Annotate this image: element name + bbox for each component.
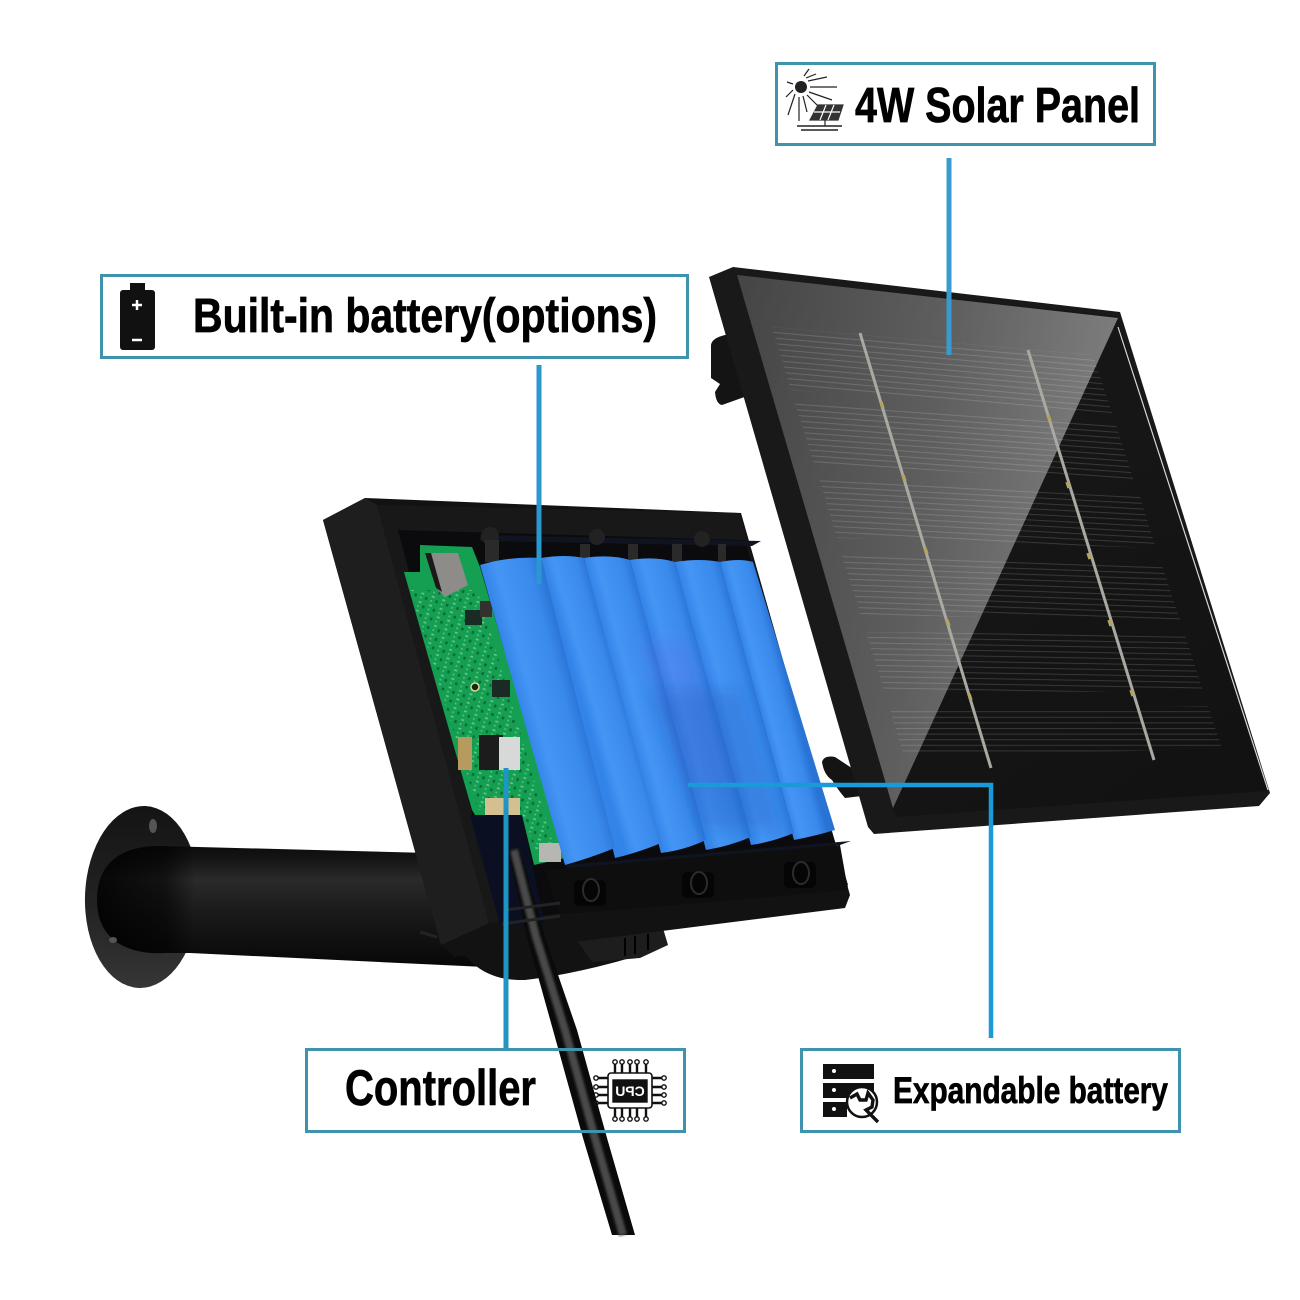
navy cavity below board bbox=[470, 815, 545, 925]
glare triangle bbox=[737, 275, 1118, 808]
flange screw hole bottom bbox=[109, 937, 117, 943]
switch dark body bbox=[479, 735, 503, 770]
busbar gold joints bbox=[881, 402, 1133, 700]
inductor bbox=[425, 553, 468, 597]
leader line: battery bbox=[536, 365, 542, 584]
leader line: expandable battery bbox=[688, 785, 991, 1038]
green board bbox=[404, 545, 565, 865]
solar cell row 2 bbox=[795, 403, 1134, 481]
cell 4 bbox=[630, 558, 751, 850]
label frame bbox=[306, 1050, 684, 1132]
icon: battery bbox=[120, 283, 155, 350]
clip slots bbox=[625, 934, 648, 956]
label: Expandable battery bbox=[802, 1050, 1180, 1132]
icon: server with wrench bbox=[823, 1064, 878, 1122]
label: Controller bbox=[306, 1050, 684, 1132]
rear mounting pegs bbox=[711, 335, 870, 798]
label frame bbox=[102, 276, 688, 358]
chip side bbox=[480, 601, 492, 617]
lower rail body bbox=[545, 845, 848, 915]
cell 5 bbox=[675, 560, 794, 845]
screw post right bbox=[793, 862, 809, 884]
post block right bbox=[784, 862, 816, 888]
solar cell row 1 bbox=[772, 327, 1112, 413]
flange screw hole top bbox=[149, 819, 157, 833]
label text: 4W Solar Panel bbox=[855, 79, 1140, 133]
mounting pole and wall flange bbox=[82, 804, 485, 990]
battery cells bbox=[480, 556, 835, 865]
dark glass bbox=[737, 275, 1268, 817]
violet sheen across cells bbox=[640, 640, 740, 790]
label frame bbox=[802, 1050, 1180, 1132]
solar cell row 5 bbox=[866, 632, 1203, 693]
post block middle bbox=[682, 872, 714, 898]
solar cell row 4 bbox=[842, 556, 1180, 620]
outer shell bbox=[323, 498, 850, 957]
left wall highlight bbox=[323, 498, 489, 945]
gold pad left bbox=[458, 737, 472, 770]
icon: CPU chip: CPU bbox=[615, 1083, 645, 1099]
tray recess behind cells bbox=[398, 530, 848, 920]
lower bracket under battery box bbox=[458, 925, 668, 980]
right edge highlight bbox=[1118, 327, 1268, 790]
chip lower bbox=[492, 680, 510, 697]
icon: sun and solar panel bbox=[786, 69, 843, 130]
cell 3 bbox=[584, 556, 706, 853]
panel frame bbox=[709, 267, 1270, 834]
cell dividers top bbox=[485, 540, 726, 564]
battery box housing bbox=[323, 498, 850, 957]
icon: CPU chip bbox=[594, 1060, 666, 1121]
leader line: solar panel bbox=[946, 158, 952, 355]
silver solder pad bbox=[539, 843, 561, 862]
power cable bbox=[420, 850, 635, 1235]
busbar left bbox=[860, 333, 991, 768]
cell 1 bbox=[480, 558, 615, 865]
screw posts top bbox=[481, 527, 710, 547]
fillet shading bbox=[97, 846, 195, 953]
cell 2 bbox=[541, 556, 661, 858]
bottom rail and screw posts bbox=[545, 841, 851, 915]
switch white cap bbox=[499, 737, 520, 770]
label text: Built-in battery(options) bbox=[193, 290, 657, 343]
chip upper bbox=[465, 610, 482, 625]
PCB controller board bbox=[404, 545, 565, 865]
wall flange disc bbox=[82, 804, 202, 990]
dark sheen across cells bbox=[650, 690, 780, 830]
cell 6 bbox=[720, 560, 835, 840]
label: 4W Solar Panel bbox=[776, 64, 1154, 144]
mounting hole bbox=[471, 683, 479, 691]
rounded bracket body bbox=[458, 925, 655, 980]
cable highlight bbox=[514, 850, 623, 1235]
busbar right bbox=[1028, 350, 1154, 760]
solar cell row 3 bbox=[819, 478, 1156, 548]
top rail bbox=[480, 535, 761, 546]
label frame bbox=[776, 64, 1154, 144]
label text: Expandable battery bbox=[893, 1070, 1168, 1111]
inner tray bbox=[377, 505, 848, 923]
solar panel bbox=[709, 267, 1270, 834]
component texture bbox=[410, 590, 555, 850]
label: Built-in battery bbox=[102, 276, 688, 358]
pole tube with base fillet bbox=[97, 846, 485, 967]
lower rail bbox=[565, 841, 851, 872]
solar cell row 6 bbox=[890, 706, 1222, 756]
cable tie bands bbox=[420, 903, 560, 937]
label text: Controller bbox=[345, 1060, 536, 1116]
leader line: controller bbox=[504, 768, 508, 1048]
screw post left bbox=[583, 879, 599, 901]
post block left bbox=[574, 880, 606, 906]
inductor shadow bbox=[425, 553, 442, 592]
cable body bbox=[508, 850, 635, 1235]
clip details bbox=[570, 925, 668, 962]
screw post middle bbox=[691, 872, 707, 894]
ribbon connector bbox=[485, 798, 520, 815]
